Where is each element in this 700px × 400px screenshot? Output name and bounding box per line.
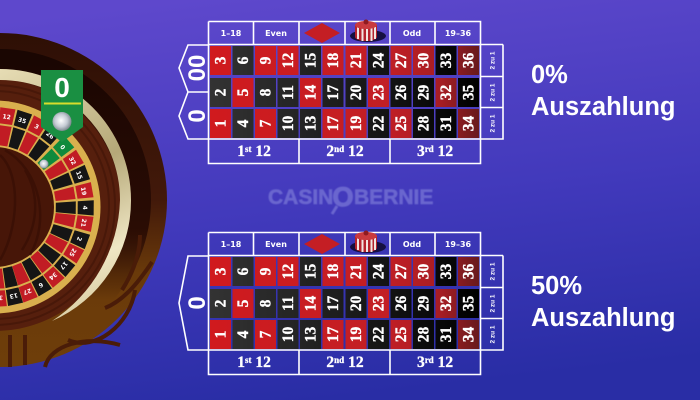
number grid: 9 [258, 56, 274, 64]
2 zu 1 column: 2 zu 1 [490, 262, 496, 281]
header row: outside bets: 1–18 [221, 29, 242, 38]
wheel numbers: 0 [58, 144, 66, 152]
number grid: 4 [235, 330, 252, 338]
number grid: 11 [280, 296, 297, 311]
number grid: 34 [460, 116, 478, 131]
number grid: 10 [280, 326, 297, 342]
wheel numbers: 27 [22, 286, 32, 296]
label: 0% Auszahlung: 0% [531, 61, 568, 89]
number grid: 8 [258, 299, 274, 307]
logo watermark [268, 182, 433, 214]
header row: outside bets: Odd [403, 240, 421, 249]
number grid: 36 [460, 52, 478, 68]
zero pockets 0 and 00 [179, 45, 211, 139]
2 zu 1 column: 2 zu 1 [490, 325, 496, 344]
number grid: 1 [212, 120, 230, 127]
2 zu 1 column [481, 51, 503, 133]
zero pockets 0 and 00: 00 [184, 55, 211, 81]
zero pockets 0 and 00: 0 [184, 109, 211, 123]
wheel numbers: 13 [9, 291, 18, 300]
dozens row: 1 [237, 143, 245, 160]
number grid: 6 [235, 267, 252, 275]
number grid: 1 [212, 331, 230, 338]
green zero marker: 0 [54, 72, 70, 103]
dozens row [237, 143, 453, 160]
number grid: 29 [416, 296, 432, 311]
number grid: 15 [302, 264, 320, 279]
number grid: 19 [348, 326, 365, 342]
number grid: 29 [416, 84, 432, 100]
2 zu 1 column: 2 zu 1 [490, 294, 496, 313]
label: 0% Auszahlung: Auszahlung [531, 93, 676, 121]
number grid: 28 [416, 116, 432, 131]
dozens row: st [245, 144, 251, 154]
number grid: 27 [393, 264, 410, 279]
roulette table: 0 and 00 [179, 20, 503, 164]
number grid: 35 [460, 84, 478, 100]
header row: outside bets: 1–18 [221, 240, 242, 249]
number grid: 20 [348, 84, 365, 100]
dozens row: 1 [237, 354, 245, 371]
dozens row: 3 [417, 143, 425, 160]
2 zu 1 column: 2 zu 1 [490, 83, 496, 102]
logo watermark: BERNIE [354, 186, 433, 209]
label: 0% Auszahlung [531, 61, 676, 121]
table markup 2 [208, 230, 503, 374]
number grid: 12 [280, 264, 297, 279]
dozens row: 12 [434, 354, 453, 371]
number grid: 17 [325, 326, 342, 342]
header row: outside bets [208, 22, 503, 164]
2 zu 1 column [481, 262, 503, 344]
number grid: 36 [460, 264, 478, 279]
number grid: 5 [235, 88, 252, 96]
wheel numbers: 32 [67, 156, 77, 166]
wood grain [10, 235, 152, 367]
header row: outside bets: Even [265, 29, 287, 38]
roulette wheel [0, 33, 167, 367]
number grid: 34 [460, 326, 478, 342]
dozens row: 12 [344, 354, 364, 371]
number grid: 3 [212, 267, 230, 275]
header row: outside bets: 19–36 [445, 29, 472, 38]
header row: outside bets: Odd [403, 29, 421, 38]
number grid: 30 [416, 52, 432, 68]
icon: chip stack [350, 230, 386, 253]
wheel numbers: 17 [58, 260, 69, 271]
number grid: 8 [258, 88, 274, 96]
number grid: 24 [370, 264, 388, 279]
number grid: 32 [438, 84, 455, 100]
number grid: 26 [393, 296, 410, 311]
wheel numbers: 21 [79, 218, 87, 227]
dozens row: 3 [417, 354, 425, 371]
number grid: 17 [325, 84, 342, 100]
number grid: 21 [348, 264, 365, 279]
roulette table: single 0 [179, 230, 503, 374]
number grid: 25 [393, 116, 410, 131]
number grid: 31 [438, 116, 455, 131]
number grid: 7 [258, 119, 274, 127]
dozens row: 12 [251, 354, 271, 371]
number grid [210, 46, 479, 138]
table markup 1 [208, 20, 503, 164]
dozens row: nd [334, 355, 344, 365]
green zero marker [41, 70, 83, 142]
dozens row [237, 354, 453, 371]
zero pocket: 0 [184, 296, 211, 310]
dozens row: rd [425, 355, 434, 365]
number grid: 5 [235, 299, 252, 307]
number grid: 9 [258, 267, 274, 275]
number grid: 13 [302, 326, 320, 342]
number grid: 31 [438, 327, 455, 342]
dozens row: 2 [326, 354, 334, 371]
wheel numbers: 3 [33, 123, 40, 131]
number grid: 27 [393, 52, 410, 68]
number grid: 6 [235, 56, 252, 64]
dozens row: 2 [326, 143, 334, 160]
label: 50% Auszahlung [531, 272, 676, 332]
header row: outside bets: Even [265, 240, 287, 249]
number grid: 33 [438, 52, 455, 68]
cream rim crescent [0, 69, 131, 321]
number grid: 13 [302, 116, 320, 131]
number grid: 17 [325, 116, 342, 131]
2 zu 1 column: 2 zu 1 [490, 114, 496, 133]
number grid: 14 [302, 296, 320, 311]
wheel numbers: 25 [67, 247, 77, 258]
icon: chip stack [350, 20, 386, 42]
logo watermark: CASIN [268, 186, 333, 209]
number grid: 21 [348, 53, 365, 68]
number grid: 4 [235, 119, 252, 127]
header row: outside bets: 19–36 [445, 240, 472, 249]
number grid: 30 [416, 264, 432, 279]
label: 50% Auszahlung: 50% [531, 272, 582, 300]
dozens row: 12 [434, 143, 453, 160]
number grid: 26 [393, 84, 410, 100]
wheel numbers: 35 [17, 116, 27, 126]
dozens row: 12 [251, 143, 271, 160]
wheel numbers [0, 107, 94, 307]
wheel numbers: 19 [79, 187, 87, 196]
wheel numbers: 26 [44, 130, 55, 141]
number grid: 18 [325, 52, 342, 68]
number grid: 23 [370, 84, 388, 100]
number grid: 23 [370, 296, 388, 311]
number grid: 12 [280, 52, 297, 68]
number grid [210, 257, 479, 349]
number grid: 32 [438, 296, 455, 311]
number grid: 22 [370, 326, 388, 342]
logo watermark: O [332, 182, 354, 212]
dozens row: nd [334, 144, 344, 154]
dozens row: st [245, 355, 251, 365]
number grid: 22 [370, 116, 388, 131]
wheel numbers: 12 [2, 113, 11, 121]
number grid: 14 [302, 84, 320, 100]
number grid: 17 [325, 296, 342, 311]
number grid: 15 [302, 52, 320, 68]
header row: outside bets [208, 232, 503, 374]
dozens row: rd [425, 144, 434, 154]
wheel numbers: 34 [47, 270, 58, 281]
number grid: 28 [416, 326, 432, 342]
wheel numbers: 15 [74, 170, 84, 180]
2 zu 1 column: 2 zu 1 [490, 51, 496, 70]
number grid: 33 [438, 264, 455, 279]
number grid: 10 [280, 116, 297, 131]
number grid: 35 [460, 296, 478, 311]
number grid: 2 [212, 299, 230, 307]
dozens row: 12 [344, 143, 364, 160]
number grid: 18 [325, 264, 342, 279]
number grid: 7 [258, 330, 274, 338]
wheel numbers: 6 [37, 280, 44, 289]
zero pocket [179, 256, 211, 350]
number grid: 19 [348, 116, 365, 131]
number grid: 24 [370, 52, 388, 68]
number grid: 3 [212, 56, 230, 64]
number grid: 25 [393, 326, 410, 342]
number grid: 2 [212, 88, 230, 96]
number grid: 20 [348, 296, 365, 311]
number grid: 11 [280, 85, 297, 100]
label: 50% Auszahlung: Auszahlung [531, 304, 676, 332]
wheel numbers: 4 [81, 206, 88, 210]
wheel numbers: 2 [75, 236, 83, 242]
